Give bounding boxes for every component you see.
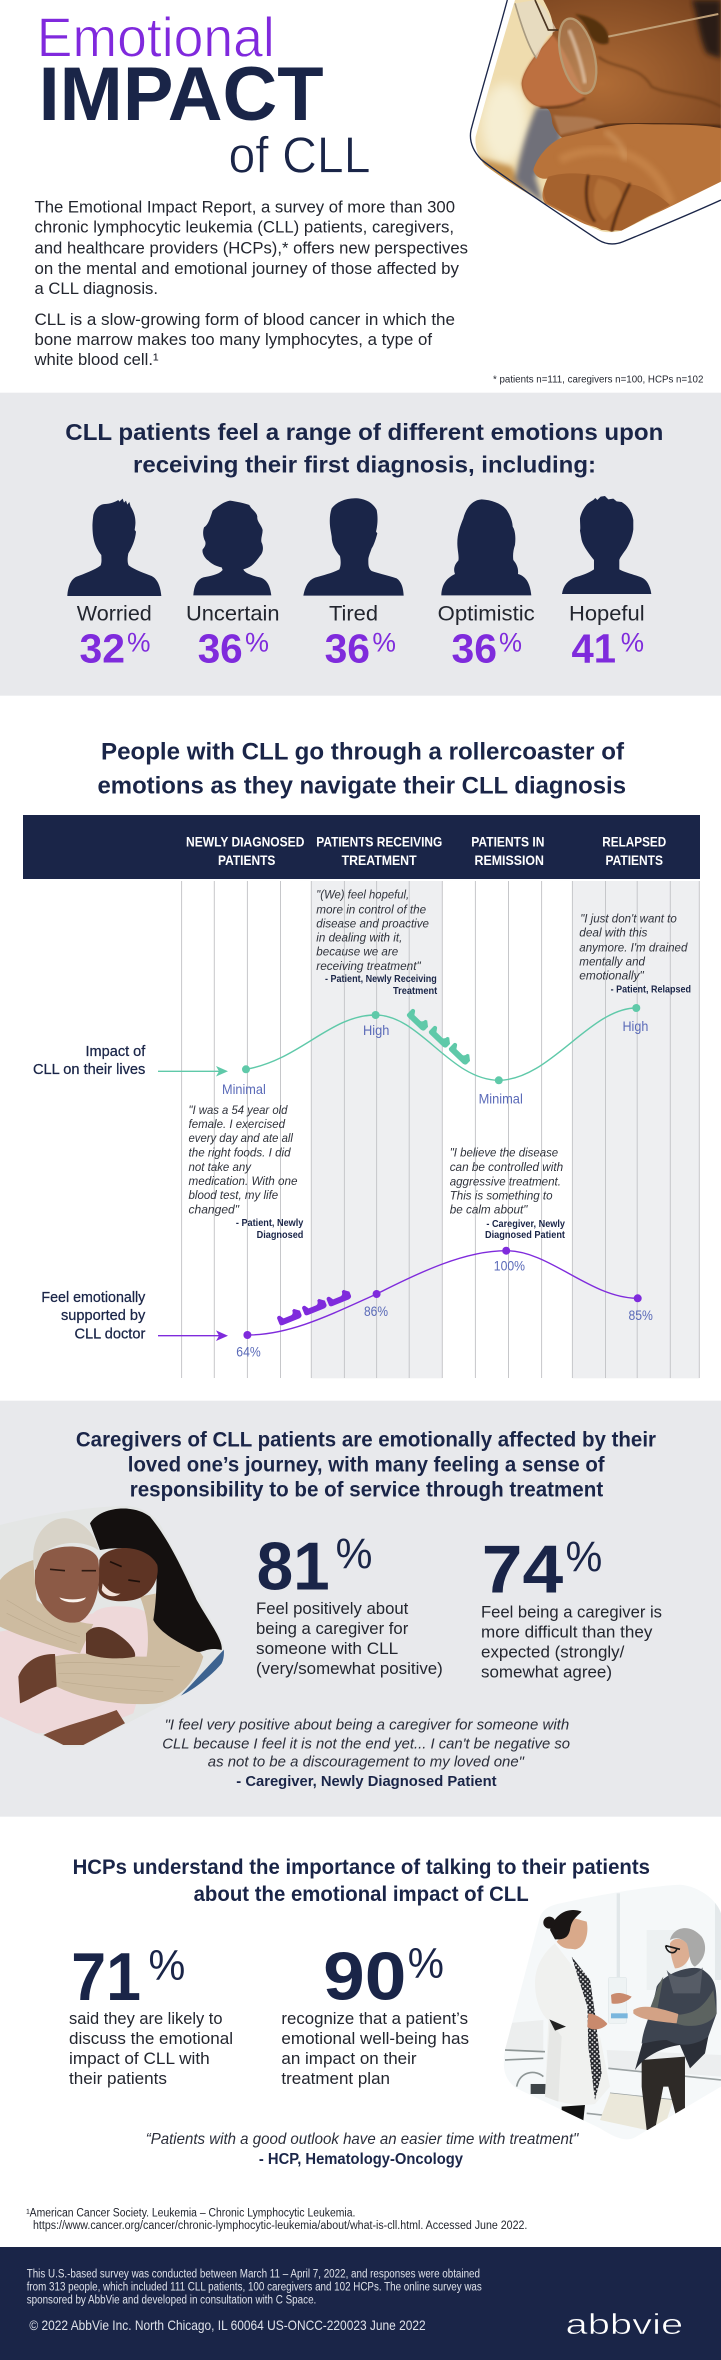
quote: receiving treatment: receiving treatment": [316, 959, 421, 973]
quote: receiving treatment: Treatment: [393, 986, 438, 997]
chart header band: PATIENTS: [606, 852, 663, 868]
quote: receiving treatment: in dealing with it,: [316, 930, 402, 944]
sample size footnote: * patients n=111, caregivers n=100, HCPs n=102: [493, 374, 704, 385]
heading: caregivers: loved one’s journey, with many feeling a sense of: [128, 1454, 606, 1477]
references: [26, 2208, 527, 2232]
chart header band: NEWLY DIAGNOSED: [186, 834, 304, 850]
emotion: hopeful 41%: [562, 496, 651, 672]
quote: remission: - Caregiver, Newly: [486, 1219, 565, 1230]
stat: 74% more difficult: [481, 1532, 662, 1681]
quote: remission: "I believe the disease: [450, 1146, 559, 1160]
chart header band: PATIENTS: [218, 852, 275, 868]
stat: 74% more difficult: Feel being a caregiver is: [481, 1602, 662, 1621]
line chart: impact of CLL on their lives: High: [622, 1018, 648, 1034]
quote: newly diagnosed: [188, 1103, 304, 1241]
quote: remission: aggressive treatment.: [450, 1175, 561, 1189]
copyright: © 2022 AbbVie Inc. North Chicago, IL 60064 US-ONCC-220023 June 2022: [29, 2317, 426, 2333]
quote: newly diagnosed: Diagnosed: [257, 1230, 303, 1241]
quote: caregiver: - Caregiver, Newly Diagnosed Patient: [236, 1774, 497, 1790]
emotion: uncertain 36%: 36: [198, 626, 243, 672]
section: rollercoaster of emotions: [23, 738, 700, 1378]
quote: newly diagnosed: the right foods. I did: [188, 1146, 291, 1160]
quote: newly diagnosed: changed": [188, 1203, 240, 1217]
label: emotionally supported: CLL doctor: [74, 1326, 145, 1342]
quote: HCP: - HCP, Hematology-Oncology: [259, 2151, 463, 2168]
quote: relapsed: anymore. I'm drained: [579, 941, 688, 955]
emotion: optimistic 36%: %: [499, 628, 522, 658]
quote: newly diagnosed: not take any: [188, 1160, 252, 1174]
icon: teal coaster cars: [406, 1007, 473, 1066]
intro text: a CLL diagnosis.: [34, 279, 158, 298]
chart grid columns: [182, 881, 699, 1378]
intro text: The Emotional Impact Report, a survey of more than 300: [34, 198, 455, 217]
emotion: uncertain 36%: [186, 501, 280, 672]
arrow: impact line: [158, 1066, 228, 1076]
emotion: tired 36%: %: [372, 628, 396, 658]
line chart: impact of CLL on their lives: Minimal: [222, 1081, 266, 1097]
heading: caregivers: [76, 1429, 656, 1502]
quote: caregiver: "I feel very positive about being a caregiver for someone with: [165, 1717, 569, 1733]
arrow: supported line: [158, 1330, 228, 1341]
emotion: worried 32%: [67, 499, 161, 672]
stat: 90% recognize: emotional well-being has: [281, 2029, 469, 2048]
section: header: [34, 0, 721, 385]
intro text: and healthcare providers (HCPs),* offers new perspectives: [34, 239, 468, 258]
footer band: [0, 2247, 721, 2360]
emotion: uncertain 36%: %: [245, 628, 269, 658]
quote: HCP: “Patients with a good outlook have an easier time with treatment": [146, 2131, 580, 2148]
line chart: feel emotionally supported by doctor: 100%: [494, 1258, 525, 1274]
quote: newly diagnosed: "I was a 54 year old: [188, 1103, 288, 1117]
stat: 81% feel positively: (very/somewhat positive): [256, 1659, 443, 1678]
chart header band: PATIENTS RECEIVING: [316, 834, 442, 850]
stat: 90% recognize: %: [408, 1940, 444, 1988]
heading: rollercoaster: People with CLL go through a rollercoaster of: [101, 738, 625, 765]
quote: HCP: [146, 2131, 580, 2168]
panel: emotions at diagnosis: [0, 393, 721, 696]
emotion: tired 36%: Tired: [329, 603, 378, 626]
stat: 71% likely to discuss: %: [148, 1942, 185, 1990]
stat: 71% likely to discuss: impact of CLL with: [69, 2049, 210, 2068]
stat: 74% more difficult: expected (strongly/: [481, 1642, 625, 1661]
intro text: CLL is a slow-growing form of blood cancer in which the: [34, 310, 455, 329]
quote: caregiver: CLL because I feel it is not the end yet... I can't be negative so: [162, 1736, 570, 1752]
quote: remission: [450, 1146, 566, 1241]
label: impact of CLL: [33, 1044, 146, 1078]
stat: 71% likely to discuss: discuss the emotional: [69, 2029, 233, 2048]
quote: remission: be calm about": [450, 1203, 528, 1217]
quote: receiving treatment: - Patient, Newly Receiving: [325, 974, 437, 985]
quote: relapsed: - Patient, Relapsed: [611, 985, 691, 996]
line chart: feel emotionally supported by doctor: 85%: [628, 1307, 653, 1323]
heading: HCPs: HCPs understand the importance of talking to their patients: [73, 1855, 650, 1879]
stat: 74% more difficult: %: [566, 1534, 602, 1582]
line chart: feel emotionally supported by doctor: 64%: [236, 1344, 261, 1360]
stat: 71% likely to discuss: said they are likely to: [69, 2009, 222, 2028]
stat: 81% feel positively: Feel positively about: [256, 1599, 409, 1618]
label: emotionally supported: Feel emotionally: [41, 1290, 146, 1306]
survey disclosure: This U.S.-based survey was conducted between March 11 – April 7, 2022, and responses were obtained: [27, 2268, 480, 2280]
survey disclosure: [27, 2268, 482, 2306]
label: emotionally supported: supported by: [61, 1308, 146, 1324]
heading: rollercoaster: emotions as they navigate their CLL diagnosis: [98, 772, 626, 799]
stat: 74% more difficult: somewhat agree): [481, 1662, 612, 1681]
stat: 71% likely to discuss: [69, 1939, 233, 2088]
heading: first diagnosis emotions: CLL patients feel a range of different emotions upon: [65, 419, 663, 445]
heading: HCPs: [73, 1855, 650, 1906]
intro text: bone marrow makes too many lymphocytes, a type of: [34, 330, 432, 349]
quote: receiving treatment: "(We) feel hopeful,: [316, 887, 409, 901]
quote: relapsed: "I just don't want to: [580, 912, 677, 926]
quote: newly diagnosed: - Patient, Newly: [236, 1218, 304, 1229]
emotion: worried 32%: Worried: [77, 603, 152, 626]
emotion: optimistic 36%: [438, 499, 535, 672]
quote: receiving treatment: because we are: [316, 944, 399, 958]
stat: 90% recognize: 90: [323, 1938, 406, 2014]
quote: remission: can be controlled with: [450, 1160, 564, 1174]
stat: 81% feel positively: being a caregiver for: [256, 1619, 409, 1638]
chart header band: PATIENTS IN: [471, 834, 544, 850]
stat: 90% recognize: an impact on their: [281, 2049, 417, 2068]
quote: relapsed: mentally and: [579, 955, 645, 969]
stat: 71% likely to discuss: 71: [71, 1939, 141, 2015]
intro text: on the mental and emotional journey of those affected by: [34, 259, 459, 278]
emotion: hopeful 41%: %: [621, 628, 644, 658]
line chart: impact of CLL on their lives: High: [363, 1022, 389, 1038]
title: IMPACT: [39, 52, 324, 137]
chart header band: REMISSION: [474, 852, 544, 868]
stat: 71% likely to discuss: their patients: [69, 2069, 167, 2088]
stat: 74% more difficult: more difficult than they: [481, 1622, 653, 1641]
references: https://www.cancer.org/cancer/chronic-lymphocytic-leukemia/about/what-is-cll.html. Accessed June 2022.: [33, 2220, 527, 2232]
title: Emotional: [37, 6, 275, 69]
title: of CLL: [228, 126, 370, 183]
intro text: white blood cell.¹: [34, 350, 159, 369]
line chart: impact of CLL on their lives: Minimal: [479, 1090, 523, 1106]
survey disclosure: from 313 people, which included 111 CLL patients, 100 caregivers and 102 HCPs. The online survey was: [27, 2282, 482, 2294]
references: ¹American Cancer Society. Leukemia – Chronic Lymphocytic Leukemia.: [26, 2208, 355, 2220]
intro text: chronic lymphocytic leukemia (CLL) patients, caregivers,: [34, 218, 454, 237]
emotion: hopeful 41%: Hopeful: [569, 603, 645, 626]
emotion: worried 32%: 32: [80, 626, 125, 672]
quote: receiving treatment: [316, 887, 438, 997]
line chart: feel emotionally supported by doctor: 86%: [364, 1303, 388, 1319]
emotion: optimistic 36%: 36: [452, 626, 497, 672]
title: [37, 6, 371, 183]
quote: newly diagnosed: blood test, my life: [188, 1188, 279, 1202]
heading: first diagnosis emotions: [65, 419, 663, 478]
emotion: optimistic 36%: Optimistic: [438, 603, 535, 626]
emotion: tired 36%: [303, 498, 404, 672]
stat: 90% recognize: treatment plan: [281, 2069, 390, 2088]
stat: 81% feel positively: someone with CLL: [256, 1639, 398, 1658]
quote: relapsed: deal with this: [579, 926, 647, 940]
quote: newly diagnosed: medication. With one: [188, 1174, 298, 1188]
section: HCPs: [69, 1855, 721, 2168]
label: emotionally supported: [41, 1290, 146, 1342]
emotion: worried 32%: %: [127, 628, 150, 658]
chart header band: [23, 815, 700, 879]
stat: 74% more difficult: 74: [482, 1532, 563, 1608]
line chart: impact of CLL on their lives: [33, 1004, 648, 1106]
intro text: [34, 198, 468, 369]
label: impact of CLL: Impact of: [86, 1044, 146, 1060]
stat: 81% feel positively: 81: [257, 1528, 330, 1604]
stat: 90% recognize: [281, 1938, 469, 2088]
emotion: hopeful 41%: 41: [572, 626, 616, 672]
quote: remission: This is something to: [450, 1189, 553, 1203]
quote: caregiver: as not to be a discouragement to my loved one": [208, 1755, 525, 1771]
photo: doctor talking with patient: [500, 1880, 721, 2143]
heading: rollercoaster: [98, 738, 626, 799]
line chart: feel emotionally supported by doctor: [41, 1247, 653, 1360]
quote: receiving treatment: more in control of the: [316, 902, 427, 916]
survey disclosure: sponsored by AbbVie and developed in consultation with C Space.: [27, 2294, 316, 2306]
logo: abbvie: abbvie: [566, 2309, 683, 2341]
heading: HCPs: about the emotional impact of CLL: [194, 1882, 529, 1906]
quote: relapsed: [579, 912, 691, 996]
quote: relapsed: emotionally": [579, 969, 644, 983]
emotion: tired 36%: 36: [325, 626, 370, 672]
quote: receiving treatment: disease and proactive: [316, 916, 429, 930]
stat: 81% feel positively: [256, 1528, 443, 1678]
photo: thoughtful man with glasses: [465, 0, 721, 250]
icon: purple coaster cars: [276, 1288, 352, 1326]
quote: newly diagnosed: every day and ate all: [188, 1131, 293, 1145]
emotion: uncertain 36%: Uncertain: [186, 603, 280, 626]
chart header band: RELAPSED: [602, 834, 666, 850]
quote: newly diagnosed: female. I exercised: [188, 1117, 285, 1131]
photo: caregiver hugging patient: [0, 1500, 230, 1755]
chart header band: TREATMENT: [342, 852, 417, 868]
quote: remission: Diagnosed Patient: [485, 1230, 566, 1241]
quote: caregiver: [162, 1717, 570, 1790]
stat: 81% feel positively: %: [336, 1530, 372, 1578]
stat: 90% recognize: recognize that a patient’s: [281, 2009, 468, 2028]
heading: first diagnosis emotions: receiving their first diagnosis, including:: [133, 452, 596, 478]
heading: caregivers: Caregivers of CLL patients are emotionally affected by their: [76, 1429, 656, 1452]
panel: caregivers: [0, 1401, 721, 1817]
label: impact of CLL: CLL on their lives: [33, 1062, 145, 1078]
heading: caregivers: responsibility to be of service through treatment: [130, 1479, 603, 1502]
